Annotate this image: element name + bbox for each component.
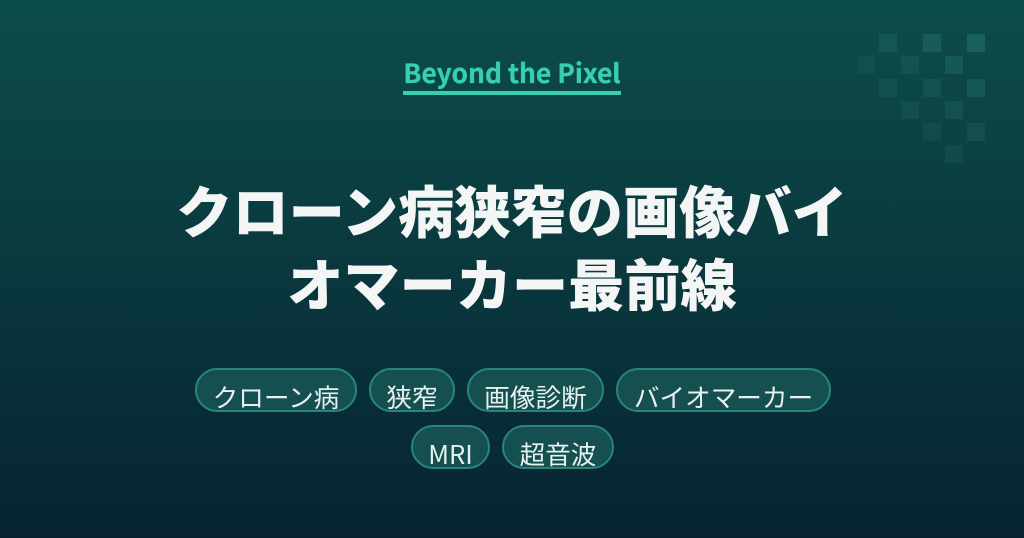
tag: 狭窄: [369, 368, 455, 412]
title: オマーカー最前線: [287, 242, 737, 323]
title: [176, 169, 848, 323]
decorative square pattern: [879, 34, 985, 163]
tag: MRI: [411, 425, 490, 469]
eyebrow label: Beyond the Pixel: Beyond the Pixel: [403, 52, 621, 91]
keyword tags: [195, 368, 831, 469]
tag: クローン病: [195, 368, 357, 412]
tag: 超音波: [502, 425, 614, 469]
tag: バイオマーカー: [616, 368, 831, 412]
title: クローン病狭窄の画像バイ: [176, 169, 848, 250]
tag: 画像診断: [467, 368, 604, 412]
